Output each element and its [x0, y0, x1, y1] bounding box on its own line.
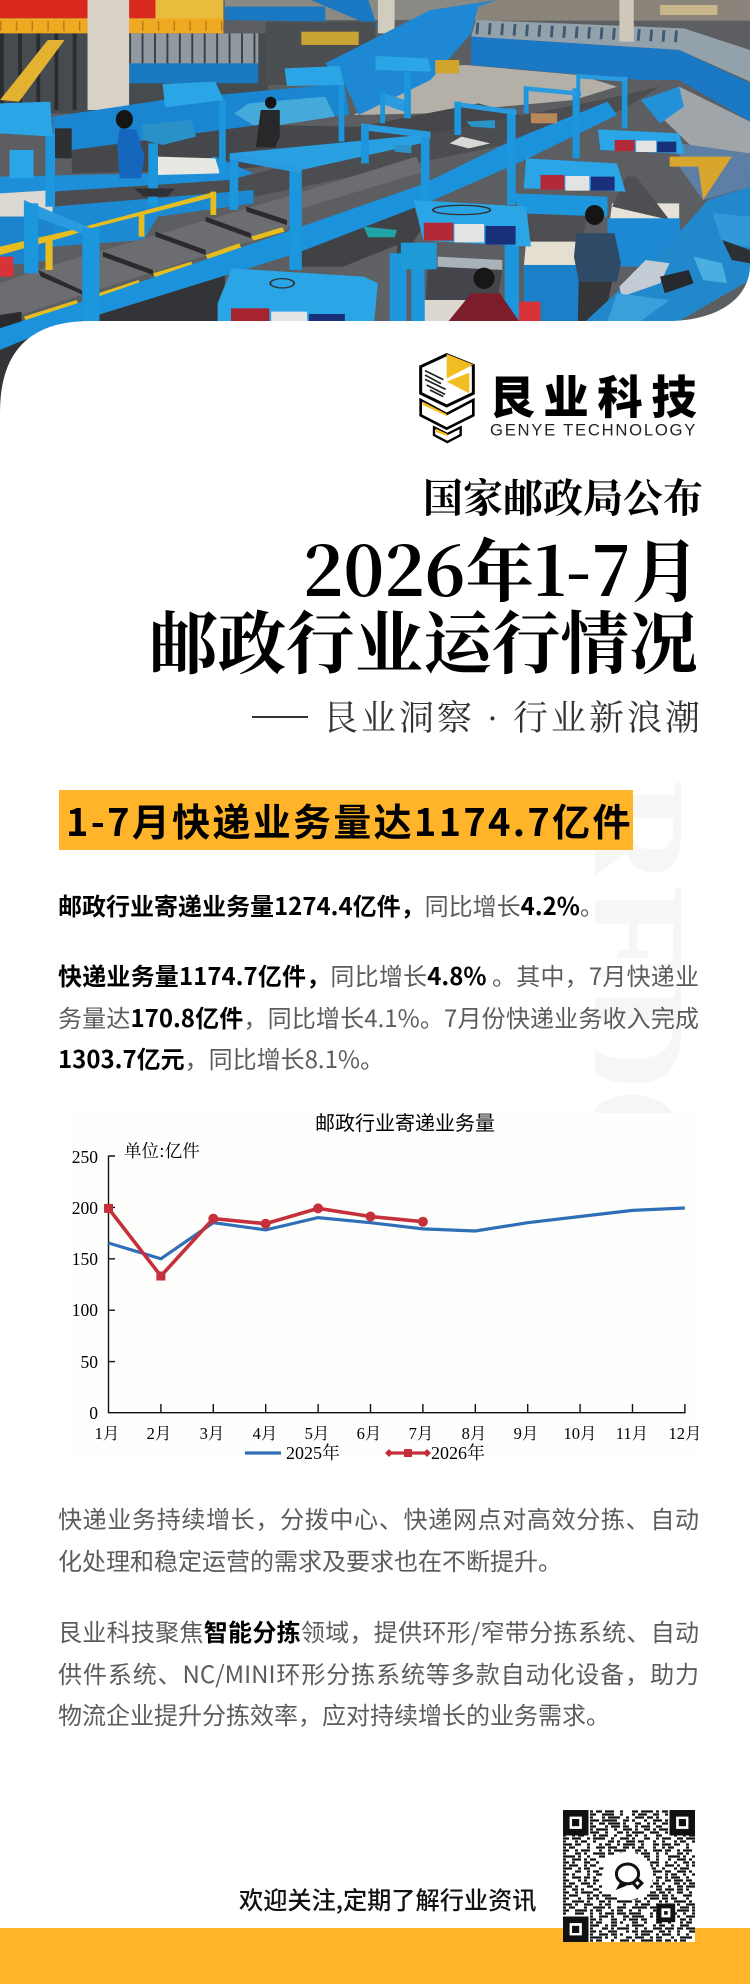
QR centre icon [616, 1864, 642, 1888]
x axis labels: 2月 [147, 1424, 171, 1443]
unit label: 单位:亿件 [124, 1138, 200, 1163]
paragraph: industry demand: 快递业务持续增长，分拨中心、快递网点对高效分拣、自动化处理和稳定运营的需求及要求也在不断提升。 [58, 1500, 699, 1577]
legend: 2025年 [286, 1442, 340, 1463]
footer call to action: 欢迎关注,定期了解行业资讯 [239, 1881, 536, 1916]
x axis labels: 4月 [253, 1424, 277, 1443]
heading: publisher line: 国家邮政局公布 [423, 467, 703, 524]
footer bar [0, 1928, 750, 1984]
subtitle rule [252, 716, 308, 718]
subtitle: 艮业洞察 · 行业新浪潮 [323, 691, 703, 741]
x axis labels: 7月 [409, 1424, 433, 1443]
x axis labels: 10月 [564, 1424, 596, 1443]
logo English name: GENYE TECHNOLOGY [490, 421, 695, 440]
logo mark [421, 354, 473, 442]
workers [116, 110, 133, 129]
sorter boxes [218, 268, 378, 333]
x axis labels: 11月 [616, 1424, 648, 1443]
x axis labels: 12月 [668, 1424, 702, 1443]
x axis labels: 5月 [305, 1424, 329, 1443]
paragraph: postal volume: 邮政行业寄递业务量1274.4亿件，同比增长4.2%。 [58, 887, 604, 922]
x axis labels: 3月 [200, 1424, 224, 1443]
x axis labels [95, 1424, 702, 1443]
QR code [563, 1810, 695, 1942]
paragraph: company focus: 艮业科技聚焦智能分拣领域，提供环形/窄带分拣系统、自动供件系统、NC/MINI环形分拣系统等多款自动化设备，助力物流企业提升分拣效率，应对持续增长的业务需求。 [58, 1613, 699, 1731]
y axis labels: 100 [72, 1300, 98, 1320]
y axis labels: 150 [72, 1249, 98, 1269]
photo: parcel sorting conveyor hall [0, 0, 750, 411]
line 2026 [104, 1203, 428, 1280]
x axis labels: 1月 [95, 1424, 119, 1443]
y axis labels [72, 1147, 98, 1423]
y axis labels: 250 [72, 1147, 98, 1167]
axes [108, 1156, 686, 1413]
logo wordmark: 艮业科技 [489, 361, 697, 427]
legend [245, 1442, 485, 1463]
logo: GENYE Technology [419, 353, 697, 444]
x axis labels: 8月 [462, 1424, 486, 1443]
title line 1: 2026年1-7月 [303, 517, 700, 616]
line 2025 [108, 1208, 685, 1259]
chart title: 邮政行业寄递业务量 [315, 1107, 495, 1136]
paragraph: express volume: 快递业务量1174.7亿件，同比增长4.8% 。其中，7月快递业务量达170.8亿件，同比增长4.1%。7月份快递业务收入完成 1303.7亿元，同比增长8.1%。 [58, 957, 699, 1075]
title line 2: 邮政行业运行情况 [149, 589, 698, 688]
y axis labels: 200 [72, 1198, 98, 1218]
x axis labels: 6月 [357, 1424, 381, 1443]
legend: 2026年 [431, 1442, 485, 1463]
y axis labels: 50 [80, 1352, 98, 1372]
y axis labels: 0 [89, 1403, 98, 1423]
blue parcel pile [586, 187, 750, 321]
highlight heading bar: 1-7月快递业务量达1174.7亿件 [66, 792, 633, 847]
chart: postal delivery volume [72, 1107, 702, 1463]
x axis labels: 9月 [514, 1424, 538, 1443]
